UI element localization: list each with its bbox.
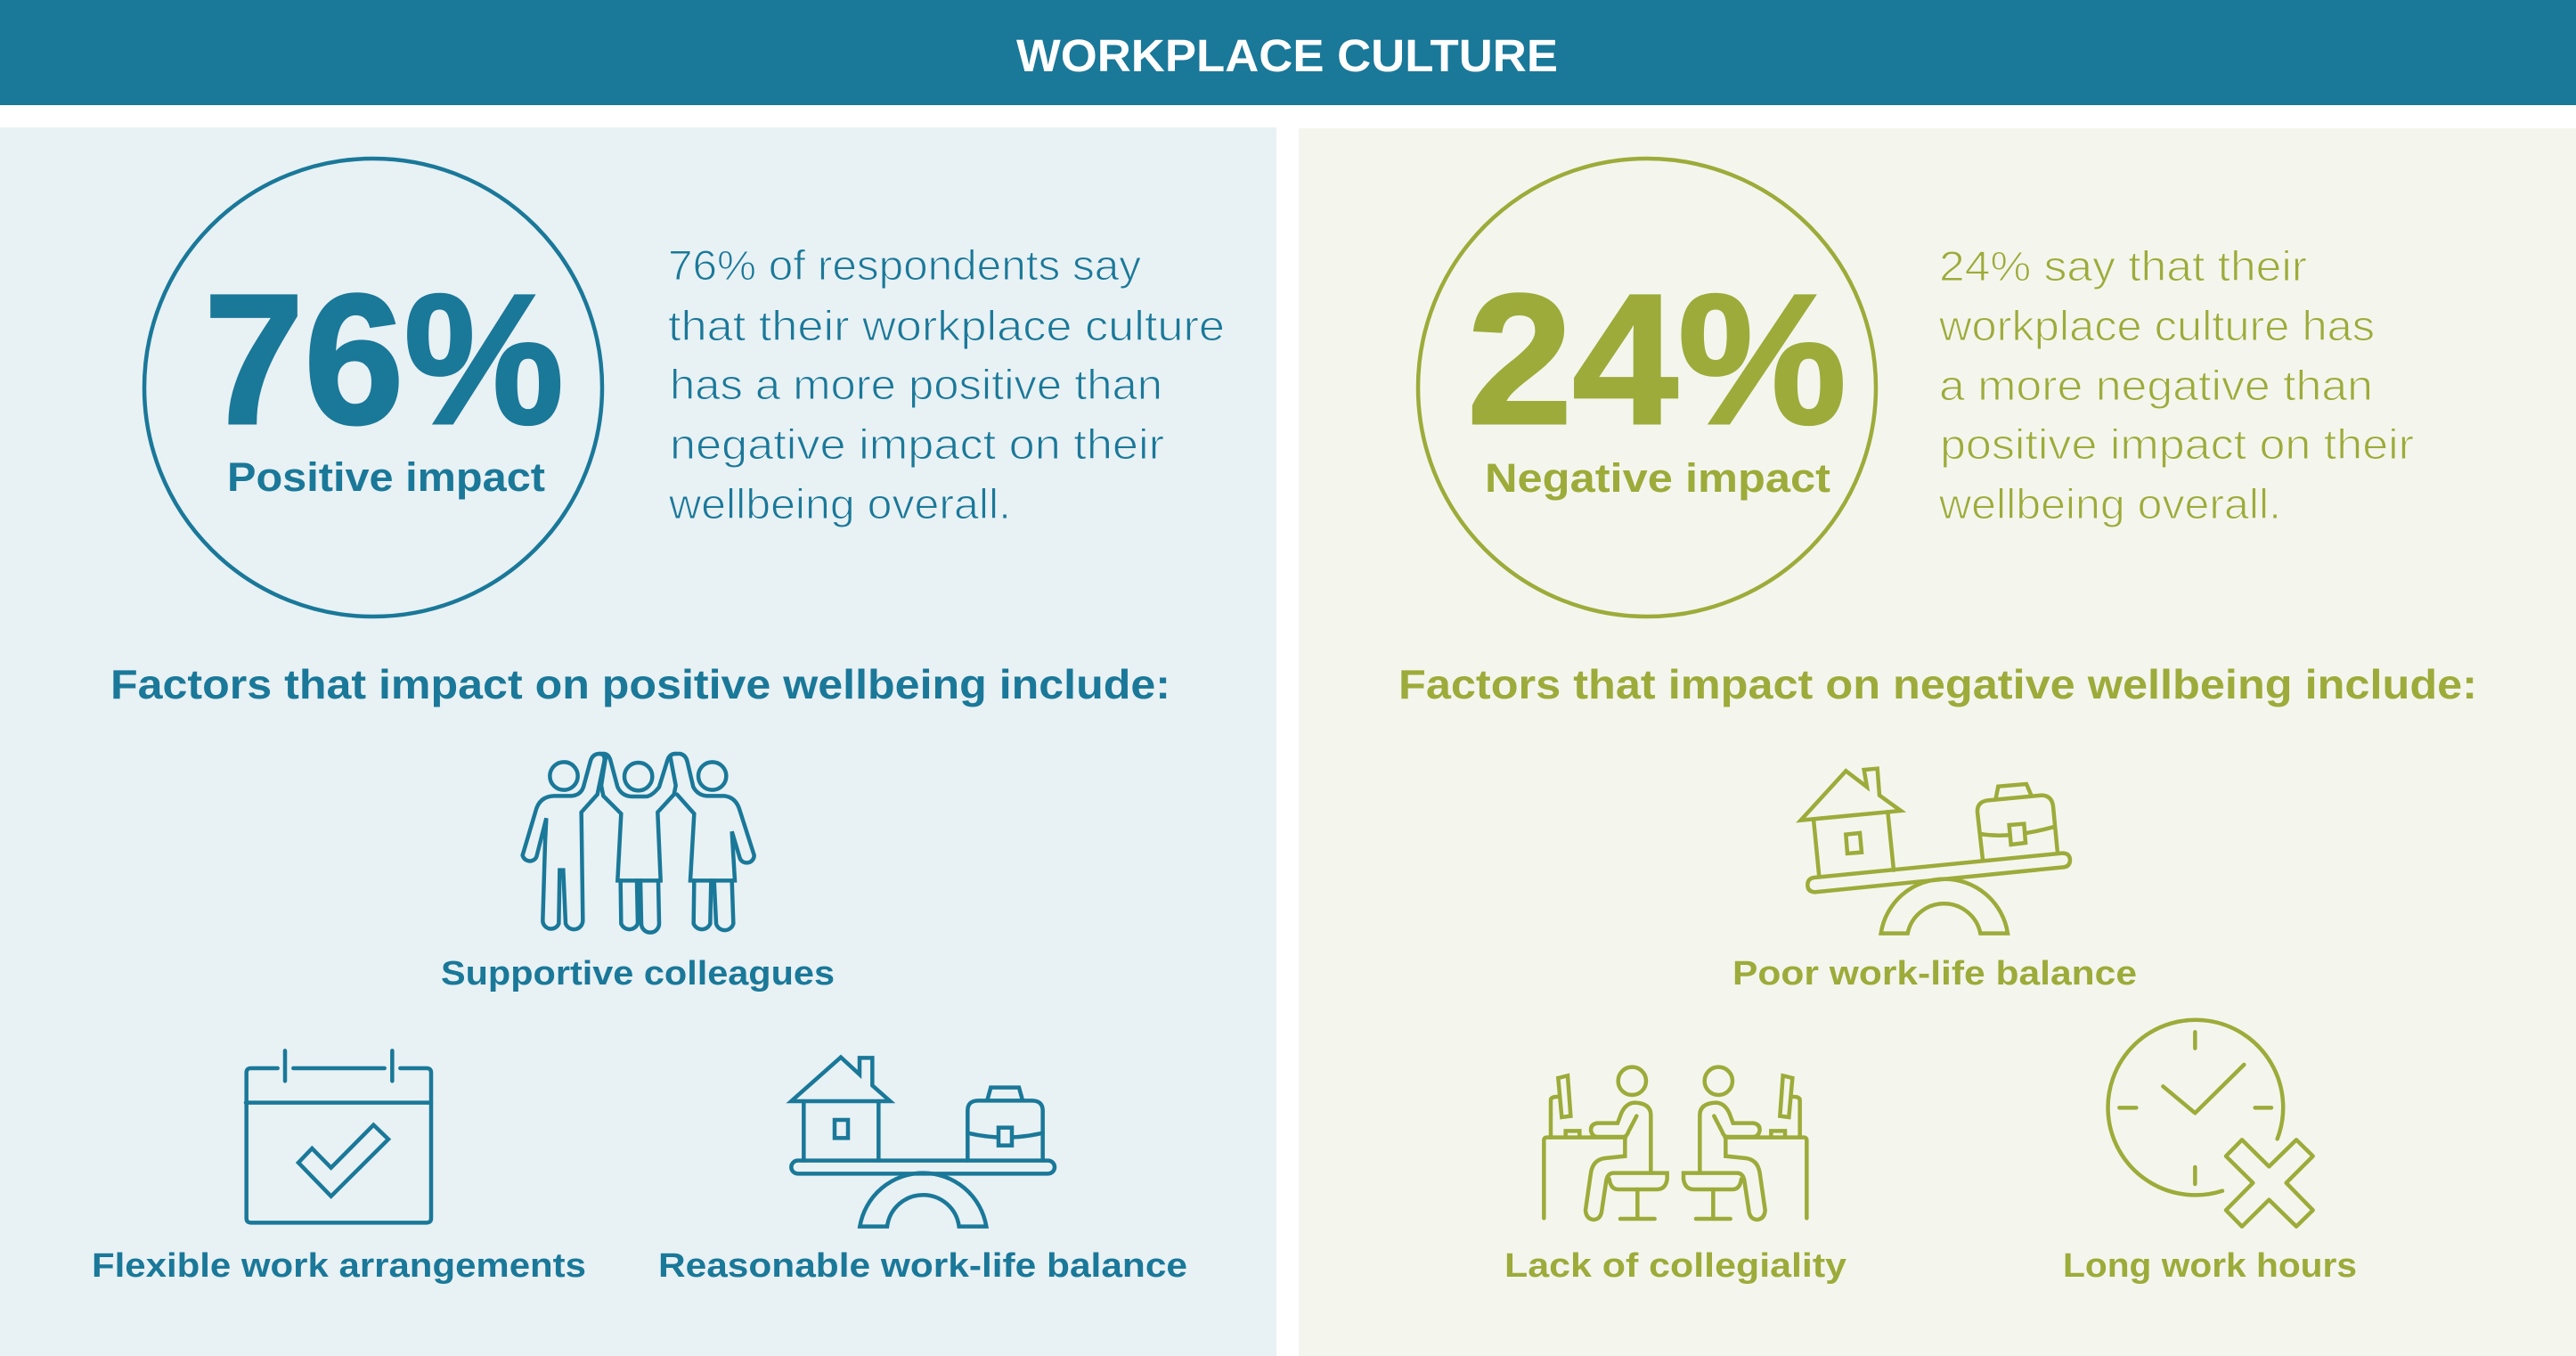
label: reasonable work-life balance: Reasonable work-life balance xyxy=(658,1247,1187,1285)
stat circle: 76% xyxy=(144,159,602,617)
icon: calendar with check xyxy=(246,1050,431,1222)
description text: workplace culture has xyxy=(1938,302,2375,349)
description text: 24% say that their xyxy=(1939,242,2307,290)
icon: clock with cross xyxy=(2108,1020,2313,1227)
factors heading: Factors that impact on negative wellbeing include: xyxy=(1398,661,2477,707)
description text xyxy=(668,241,1225,527)
factors heading: Factors that impact on positive wellbeing include: xyxy=(110,661,1170,707)
stat circle: 76%: 76% xyxy=(204,257,564,463)
description text: that their workplace culture xyxy=(668,302,1225,349)
label: flexible work arrangements: Flexible work arrangements xyxy=(92,1247,586,1285)
panel: positive impact xyxy=(0,127,1276,1356)
header banner xyxy=(0,0,2576,105)
stat circle: 24%: Negative impact xyxy=(1485,455,1830,501)
description text: negative impact on their xyxy=(670,421,1164,468)
description text xyxy=(1938,242,2414,527)
title: WORKPLACE CULTURE xyxy=(1016,30,1558,81)
description text: has a more positive than xyxy=(670,361,1162,408)
label: long work hours: Long work hours xyxy=(2063,1247,2357,1285)
label: supportive colleagues: Supportive colleagues xyxy=(441,955,835,992)
label: lack of collegiality: Lack of collegiality xyxy=(1504,1247,1846,1285)
description text: wellbeing overall. xyxy=(668,480,1011,527)
stat circle: 24% xyxy=(1418,159,1876,617)
icon: tilted house and briefcase xyxy=(1801,769,2070,934)
stat circle: 24%: 24% xyxy=(1467,257,1846,463)
description text: 76% of respondents say xyxy=(668,241,1142,289)
icon: balanced house and briefcase xyxy=(791,1058,1055,1227)
icon: two people at separate desks xyxy=(1544,1067,1806,1220)
description text: positive impact on their xyxy=(1940,421,2414,468)
stat circle: 76%: Positive impact xyxy=(227,454,545,500)
icon: supportive colleagues xyxy=(523,754,754,933)
label: poor work-life balance: Poor work-life balance xyxy=(1732,955,2137,992)
description text: wellbeing overall. xyxy=(1938,480,2281,527)
panel: negative impact xyxy=(1299,128,2576,1356)
description text: a more negative than xyxy=(1939,362,2373,409)
